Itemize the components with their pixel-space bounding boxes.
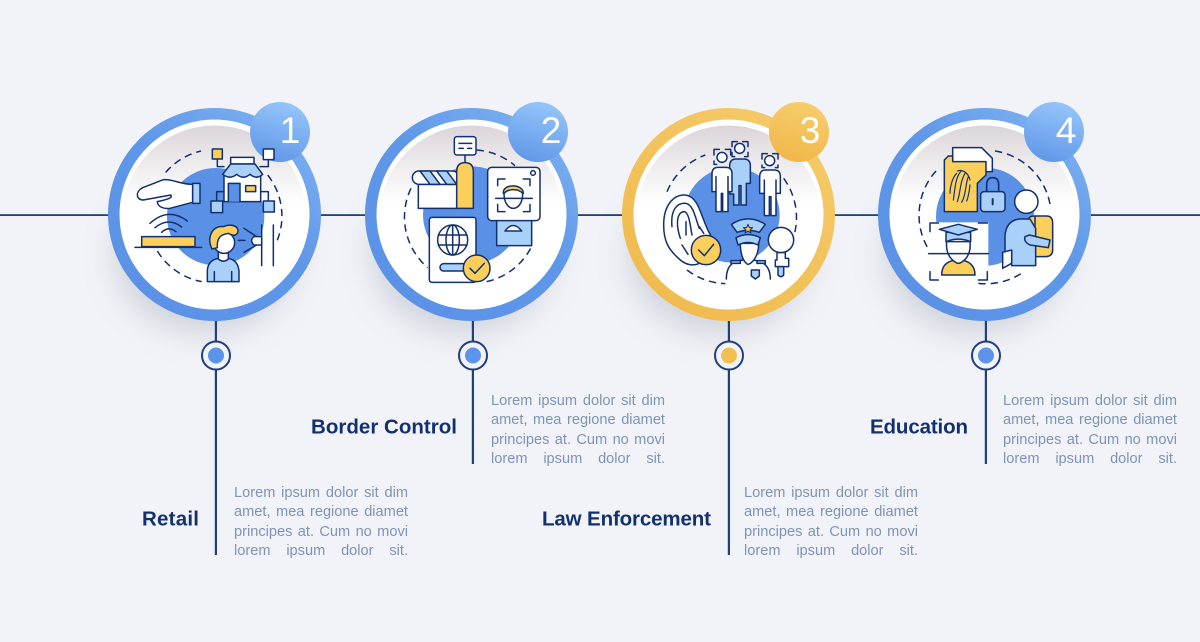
- heading: retail: Retail: [142, 508, 199, 530]
- ring: border control: [365, 108, 578, 321]
- panel: retail: [108, 102, 408, 564]
- text block: education: lorem ipsum dolor sit.: [1003, 451, 1177, 467]
- text block: retail: principes at. Cum no movi: [234, 524, 408, 540]
- ring: education: [878, 108, 1091, 321]
- text block: retail: [234, 484, 408, 564]
- icon: law enforcement: [664, 142, 796, 284]
- number badge 3: 3: [800, 110, 820, 151]
- number badge 2: 2: [541, 110, 561, 151]
- text block: education: [1003, 392, 1177, 472]
- panel: border control: [311, 102, 665, 472]
- text block: law enforcement: [744, 484, 918, 564]
- number badge 4: [1024, 102, 1084, 162]
- text block: retail: amet, mea regione diamet: [234, 504, 408, 520]
- text block: education: amet, mea regione diamet: [1003, 412, 1177, 428]
- number badge 3: [769, 102, 829, 162]
- number badge 4: 4: [1056, 110, 1076, 151]
- number badge 1: [250, 102, 310, 162]
- text block: education: principes at. Cum no movi: [1003, 432, 1177, 448]
- connector dot 2: [459, 342, 487, 370]
- text block: border control: lorem ipsum dolor sit.: [491, 451, 665, 467]
- panel: law enforcement: [542, 102, 918, 564]
- text block: retail: lorem ipsum dolor sit.: [234, 543, 408, 559]
- connector dot 3: [715, 342, 743, 370]
- ring: law enforcement: [622, 108, 835, 321]
- text block: law enforcement: principes at. Cum no movi: [744, 524, 918, 540]
- text block: law enforcement: Lorem ipsum dolor sit dim: [744, 485, 918, 501]
- text block: retail: Lorem ipsum dolor sit dim: [234, 485, 408, 501]
- number badge 2: [508, 102, 568, 162]
- connector dot 4: [972, 342, 1000, 370]
- horizontal timeline line: [0, 214, 1200, 216]
- icon: education: [919, 148, 1053, 284]
- connector dot 1: [202, 342, 230, 370]
- text block: border control: amet, mea regione diamet: [491, 412, 665, 428]
- panel: education: [870, 102, 1177, 472]
- text block: education: Lorem ipsum dolor sit dim: [1003, 393, 1177, 409]
- text block: law enforcement: amet, mea regione diamet: [744, 504, 918, 520]
- ring: retail: [108, 108, 321, 321]
- text block: border control: principes at. Cum no movi: [491, 432, 665, 448]
- heading: border control: Border Control: [311, 416, 457, 438]
- heading: law enforcement: Law Enforcement: [542, 508, 711, 530]
- text block: law enforcement: lorem ipsum dolor sit.: [744, 543, 918, 559]
- heading: education: Education: [870, 416, 968, 438]
- text block: border control: [491, 392, 665, 472]
- number badge 1: 1: [280, 110, 300, 151]
- text block: border control: Lorem ipsum dolor sit dim: [491, 393, 665, 409]
- icon: border control: [404, 137, 540, 282]
- icon: retail biometric scan: [135, 149, 282, 282]
